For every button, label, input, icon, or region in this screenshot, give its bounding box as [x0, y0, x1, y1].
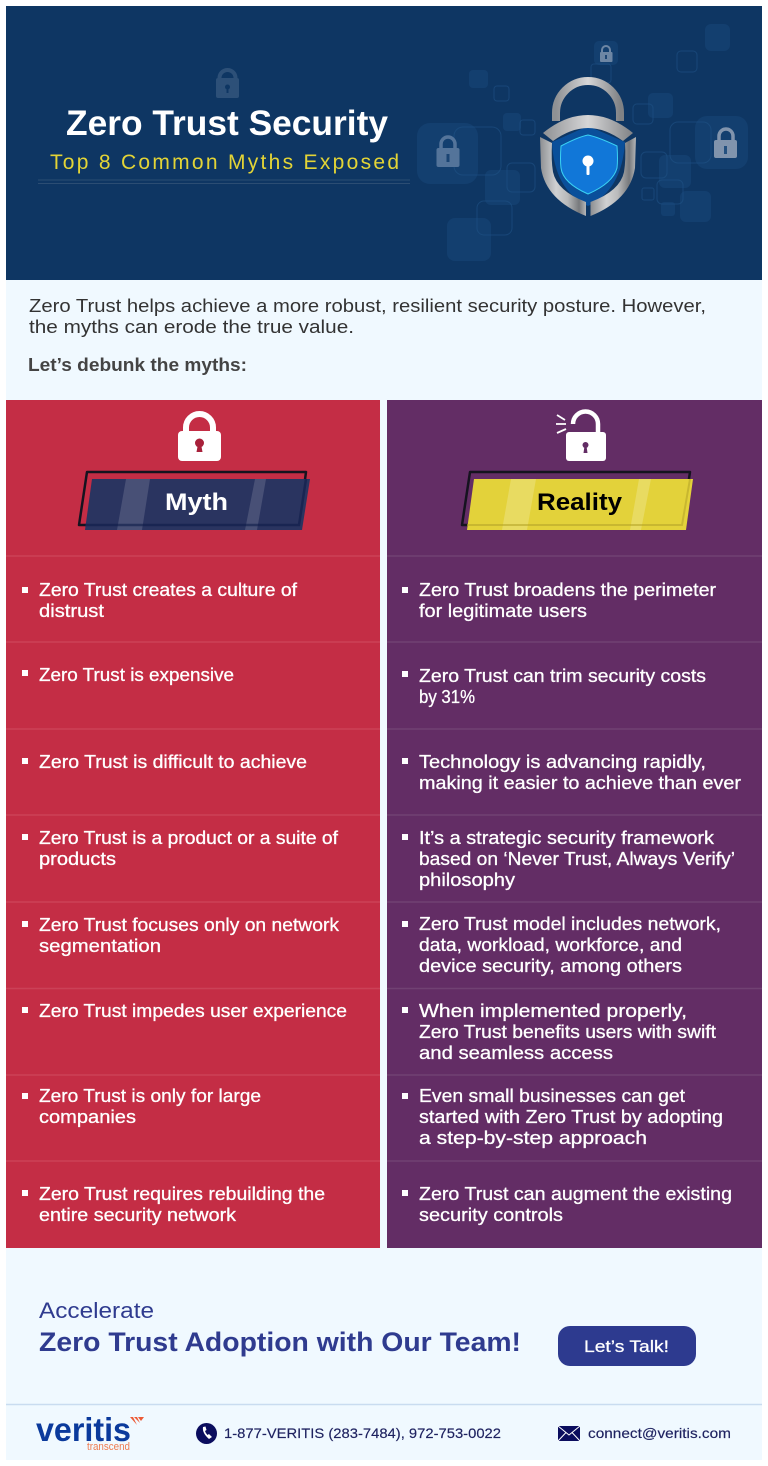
intro text: the myths can erode the true value.: [29, 316, 354, 337]
myth list: Zero Trust requires rebuilding the: [39, 1183, 325, 1204]
reality list: [402, 579, 741, 1225]
reality list: Zero Trust benefits users with swift: [419, 1021, 716, 1042]
decorative outlined squares: [454, 51, 711, 235]
faded lock left of title: [216, 70, 239, 98]
myth list: [22, 579, 347, 1225]
panel: reality: [387, 400, 762, 1248]
myth list: Zero Trust impedes user experience: [39, 1000, 347, 1021]
myth list: segmentation: [39, 935, 161, 956]
call to action: Accelerate: [39, 1298, 154, 1323]
myth list: Zero Trust focuses only on network: [39, 914, 340, 935]
reality list: for legitimate users: [419, 600, 587, 621]
reality list: by 31%: [419, 686, 475, 707]
reality list: data, workload, workforce, and: [419, 934, 682, 955]
reality list: Zero Trust can trim security costs: [419, 665, 706, 686]
reality list: security controls: [419, 1204, 563, 1225]
reality list: Zero Trust model includes network,: [419, 913, 721, 934]
title: Zero Trust Security: [66, 104, 389, 143]
badge: myth: Myth: [165, 489, 228, 516]
badge: myth: [79, 472, 310, 530]
reality list: based on ‘Never Trust, Always Verify’: [419, 848, 735, 869]
phone number: 1-877-VERITIS (283-7484), 972-753-0022: [224, 1425, 501, 1441]
icon: closed lock: [178, 414, 221, 461]
subtitle: Top 8 Common Myths Exposed: [50, 151, 399, 174]
myth list: products: [39, 848, 116, 869]
reality list: Zero Trust can augment the existing: [419, 1183, 732, 1204]
logo: veritis: transcend: [87, 1441, 130, 1453]
faded lock right: [714, 129, 737, 158]
reality list: device security, among others: [419, 955, 682, 976]
myth list: Zero Trust is only for large: [39, 1085, 261, 1106]
subheading: debunk: Let’s debunk the myths:: [28, 354, 247, 375]
intro text: Zero Trust helps achieve a more robust, resilient security posture. However,: [29, 295, 706, 316]
myth list: companies: [39, 1106, 136, 1127]
logo: veritis: veritis: [36, 1411, 131, 1448]
icon: metal padlock shield: [540, 81, 636, 216]
button: let's talk: Let’s Talk!: [584, 1337, 669, 1356]
email address: connect@veritis.com: [588, 1425, 731, 1441]
reality list: started with Zero Trust by adopting: [419, 1106, 723, 1127]
myth list: Zero Trust is a product or a suite of: [39, 827, 339, 848]
call to action: Zero Trust Adoption with Our Team!: [39, 1327, 521, 1357]
intro text: [29, 295, 706, 337]
reality list: When implemented properly,: [419, 1000, 687, 1021]
myth list: Zero Trust is difficult to achieve: [39, 751, 307, 772]
faded lock left: [436, 137, 460, 167]
reality list: and seamless access: [419, 1042, 613, 1063]
icon: phone: [196, 1423, 217, 1444]
reality list: a step-by-step approach: [419, 1127, 647, 1148]
myth list: entire security network: [39, 1204, 237, 1225]
myth list: Zero Trust is expensive: [39, 664, 234, 685]
badge: reality: Reality: [537, 489, 623, 516]
icon: open lock: [556, 411, 606, 461]
faded lock small top: [600, 46, 612, 62]
myth list: distrust: [39, 600, 104, 621]
icon: envelope: [558, 1426, 580, 1441]
reality list: making it easier to achieve than ever: [419, 772, 741, 793]
reality list: philosophy: [419, 869, 516, 890]
myth list: Zero Trust creates a culture of: [39, 579, 298, 600]
reality list: Zero Trust broadens the perimeter: [419, 579, 716, 600]
reality list: It’s a strategic security framework: [419, 827, 715, 848]
button: let's talk: [558, 1326, 696, 1366]
reality list: Technology is advancing rapidly,: [419, 751, 706, 772]
decorative filled squares: [417, 24, 748, 261]
header banner: [6, 6, 762, 280]
badge: reality: [462, 472, 693, 530]
panel: myth: [6, 400, 380, 1248]
reality list: Even small businesses can get: [419, 1085, 685, 1106]
call to action: [39, 1298, 521, 1357]
